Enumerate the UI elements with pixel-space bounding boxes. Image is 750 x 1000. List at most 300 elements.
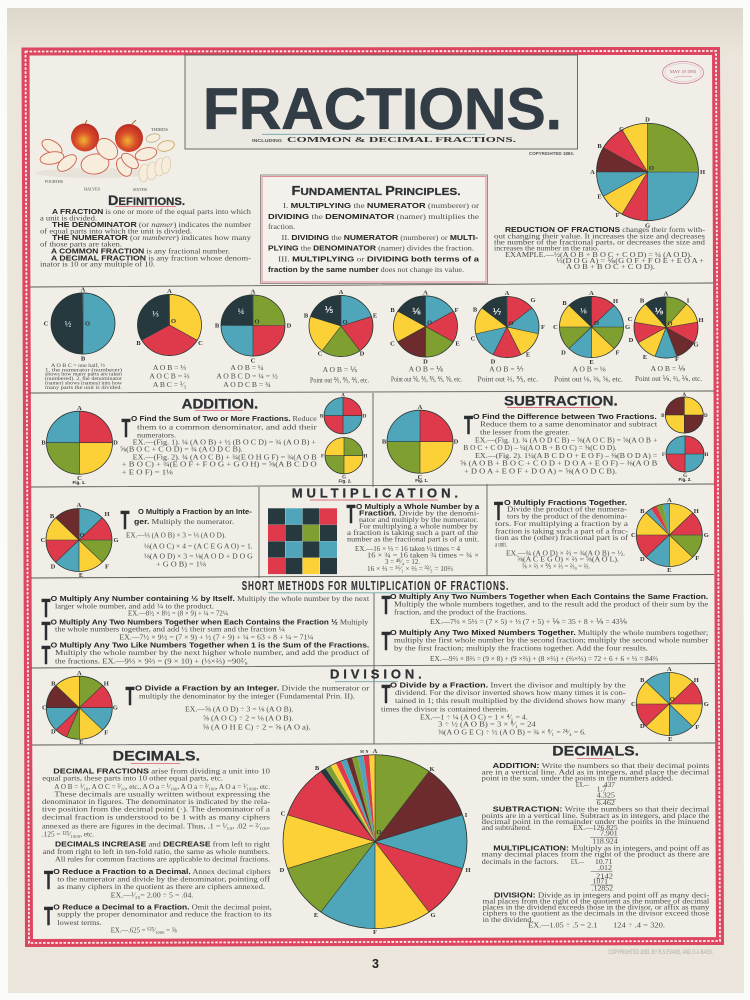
text: multiply fraction by integer: O Multiply a Fraction by an Inte- [138, 507, 252, 516]
pie: fifths: B [304, 313, 309, 319]
text: reduce fraction to decimal: as many ciphers in the quotient as there are ciphers annexed. [57, 882, 265, 891]
text: reduce fraction to decimal: O Reduce a Fraction to a Decimal. Annex decimal ciphers [53, 867, 271, 876]
drop cap T: T [382, 679, 391, 709]
text: reduction of fractions: A O B + B O C + C O D). [566, 262, 655, 271]
pie: fifths [304, 289, 377, 358]
slice captions: SIXTHS [133, 188, 147, 192]
pie: eighths: F [616, 350, 620, 357]
addition rule: EX.— [576, 780, 589, 789]
text: reduction of fractions: increases the number in the ratio. [494, 244, 599, 253]
addition rule: 1.7 [597, 785, 607, 794]
pie: reduction of fractions: C [619, 126, 624, 133]
copyright line: COPYRIGHTED 1893. [529, 151, 574, 156]
pie: sixths: O [427, 320, 432, 327]
decimals text: These decimals are usually written without expressing the [54, 790, 271, 799]
pie: sevenths: F [541, 324, 545, 331]
caption: sixths: Point out ⅙, ⅖, ⅗, ⅘, ⅚, etc. [391, 374, 462, 384]
left methods text: O Multiply Any Number containing ½ by Itself. Multiply the whole number by the next [51, 594, 370, 603]
text: divide by a fraction: 3 ÷ ½ (A O B) = 3 × ⁸⁄₁ = 24 [438, 719, 536, 728]
text: reduction of fractions [494, 225, 706, 271]
caption: thirds: A O B = ⅓ [153, 363, 186, 372]
title: Fractions: FRACTIONS. [203, 77, 562, 142]
text: divide fraction by integer: ⅝ (A O C) ÷ 2 = ⅛ (A O B). [203, 714, 293, 723]
pie: subtraction figure 2 bottom [662, 436, 709, 479]
pie: sixths: F [455, 307, 459, 314]
principles text: fraction by the same number does not change its value. [268, 265, 464, 274]
pie: thirds [136, 288, 203, 356]
definition text: inator is 10 or any multiple of 10. [40, 260, 155, 269]
multiplication rule [482, 844, 710, 893]
text: multiply fractions together: Divide the product of the numera- [507, 505, 628, 514]
text: reduction of fractions: the number of the fractional parts, or decreases the size and [494, 238, 705, 247]
decimals text: equal parts, these parts into 10 other equal parts, etc. [42, 774, 223, 783]
text: multiply fractions together: fraction is taking such a part of a frac- [495, 526, 629, 535]
pie: addition figure 1: C [77, 475, 82, 482]
pie: ninths: F [675, 356, 679, 363]
pie: divide by integer: D [51, 729, 56, 735]
heading: division: DIVISION. [330, 666, 422, 681]
subtraction text: the lesser from the greater. [480, 427, 570, 436]
text: reduction of fractions: out changing their value. It increases the size and decreases [494, 232, 705, 240]
drop cap T: T [44, 865, 53, 895]
addition text: numerators. [137, 430, 176, 439]
heading: addition: ADDITION. [182, 396, 258, 412]
library stamp [662, 62, 704, 84]
text: reduction of fractions: REDUCTION OF FRACTIONS changes their form with- [505, 225, 706, 234]
pie: multiply by integer: G [113, 537, 119, 544]
pie: multiply fractions: C [631, 532, 636, 539]
caption: thirds [149, 363, 190, 389]
checker grid [268, 508, 337, 574]
definition text: of equal parts into which the unit is divided. [40, 226, 192, 235]
pie: multiply fractions: D [640, 556, 645, 563]
pie: large decimal circle: C [281, 811, 286, 818]
text: multiply fractions together: ⅝ × ⅔ × ⅖ × ⅔ = ⅔₀ = ⅔. [522, 561, 590, 570]
pie: ninths: A [664, 291, 669, 297]
pie: addition figure 2 bottom: H [364, 455, 368, 460]
caption: thirds: A O C B = ⅔ [149, 372, 190, 380]
pie: fifths: A [339, 289, 344, 296]
principles text: III. MULTIPLYING or DIVIDING both terms of a [278, 254, 480, 264]
multiplication rule: 1071 [593, 876, 608, 885]
caption: fifths: A O B = ⅕ [323, 365, 358, 374]
pie: fifths: E [373, 313, 377, 319]
pie: subtraction figure 1: D [454, 439, 459, 446]
pie: fifths: O [342, 319, 348, 326]
text: multiply fractions together: tion as the (other) fractional part is of [495, 533, 629, 542]
pie: halves: C [44, 321, 49, 327]
pie: fourths: O [254, 319, 260, 326]
text: multiply whole number by fraction: nator and multiply by the numerator. [359, 515, 478, 524]
text: multiply whole number by fraction: 16 × ⅔ = ¹⁶⁄₁ × ⅔ = ³²⁄₃ = 10⅔ [367, 564, 453, 573]
text: multiply fraction by integer: EX.—⅓ (A O B) × 3 = ⅓ (A O D). [126, 531, 226, 540]
drop cap T: T [120, 505, 130, 535]
text: multiply whole number by fraction: O Multiply a Whole Number by a [356, 502, 480, 511]
pie: ninths: E [643, 354, 647, 361]
text: multiply fraction by integer: + G O B) = 1⅛ [156, 560, 206, 569]
left methods text: EX.—8½ × 8½ = (8 × 9) + ¼ = 72¼ [128, 609, 228, 618]
text: multiply fractions together: tors by the product of the denomina- [507, 511, 627, 520]
pie: multiply fractions: A [667, 497, 672, 504]
subtraction rule: 118.924 [592, 836, 618, 845]
pie: sixths: E [455, 341, 460, 348]
decimals text: All rules for common fractions are applicable to decimal fractions. [55, 854, 270, 863]
pie: sevenths: C [471, 335, 476, 342]
principles text: PLYING the DENOMINATOR (namer) divides the fraction. [268, 244, 474, 253]
subtraction text: + D O A + E O F + D O A) = ⅝(A O D C B). [464, 466, 617, 475]
pie: sevenths: O [508, 320, 514, 327]
decimals text: tive position from the decimal point (·). The denominator of a [42, 805, 271, 814]
text: reduce decimal to fraction: O Reduce a Decimal to a Fraction. Omit the decimal point, [53, 902, 272, 911]
figure captions: Fig. 2. [338, 478, 352, 484]
text: divide by a fraction: dividend. For the divisor inverted shows how many times it is con- [395, 688, 626, 697]
text: multiply fraction by integer: ⅛(A O C) × 4 = (A C E G A O) = 1. [144, 541, 253, 550]
pie: divide by fraction: O [670, 696, 675, 703]
addition text [120, 414, 317, 477]
text: reduce decimal to fraction: supply the proper denominator and reduce the fraction to its [57, 910, 272, 919]
pie: large decimal circle: H [465, 867, 471, 874]
decimals text: .125 = ¹²⁵⁄₁₀₀₀, etc. [42, 830, 94, 839]
right drop caps [382, 590, 391, 656]
heading: definitions: DEFINITIONS. [108, 192, 185, 208]
subtraction text [460, 412, 658, 475]
pie: divide by fraction: D [640, 723, 645, 730]
text: reduce fraction to decimal: EX.—¹⁄₂₅= 2.00 ÷ 5 = .04. [111, 890, 193, 899]
division rule: places in the dividend exceeds those in the divisor, or affix as many [483, 903, 710, 912]
pie: ninths: B [640, 298, 645, 305]
panel: definitions [40, 192, 252, 269]
subtitle [252, 135, 516, 144]
caption: halves: shows how many parts are taken [45, 372, 122, 378]
pie: multiply by integer: D [51, 564, 56, 571]
addition rule: 6.462 [597, 798, 615, 807]
pie: reduction of fractions: B [597, 143, 602, 150]
pie: subtraction figure 2 top: A [682, 393, 687, 398]
pie: addition figure 2 top: D [363, 415, 367, 420]
addition text: them to a common denominator, and add their [137, 422, 317, 431]
pie: addition figure 2 top: A [341, 394, 345, 399]
pie: halves: A [81, 287, 86, 293]
pie: large decimal circle [280, 748, 471, 936]
subtraction rule [482, 805, 710, 845]
text: divide fraction by integer [135, 684, 370, 731]
slice captions: HALVES [84, 188, 100, 192]
text: multiply whole number by fraction: EX.—16 × ⅓ = 16 taken ⅓ times = 4 [355, 544, 460, 553]
page number: 3 [372, 957, 379, 971]
left drop caps: T [42, 593, 51, 623]
pie: addition figure 2 bottom: F [321, 455, 324, 460]
pie: eighths: B [562, 300, 567, 307]
pie: eighths: C [553, 324, 558, 331]
panel: short methods [42, 578, 709, 670]
heading: decimals: DECIMALS. [113, 748, 200, 764]
left methods text: the fractions. EX.—9⅓ × 9⅔ = (9 × 10) + (⅓×⅔) =90²⁄₉ [55, 656, 248, 665]
caption: fourths [216, 363, 278, 389]
subtraction rule: EX.—126.825 [573, 823, 618, 832]
multiplication rule: .12852 [592, 884, 613, 893]
caption: halves: (namer) shows (names) into how [45, 379, 122, 386]
pie: thirds: B [136, 340, 141, 347]
right methods text [390, 592, 709, 663]
pie: addition figure 2 bottom: G [342, 476, 346, 481]
subtraction text: O Find the Difference between Two Fractions. [473, 412, 657, 421]
pie: large decimal circle: G [430, 912, 436, 919]
caption: halves [45, 362, 122, 391]
addition text: + E O F) = 1⅛ [122, 468, 173, 477]
decimals text: DECIMAL FRACTIONS arise from dividing a unit into 10 [53, 766, 270, 775]
pie: sevenths: G [530, 297, 536, 304]
title underline [262, 133, 485, 135]
drop cap T: T [44, 901, 53, 931]
pie: eighths [553, 290, 630, 366]
caption: sixths: A O B = ⅙ [409, 364, 444, 374]
pie: large decimal circle: B [315, 765, 320, 772]
definition text: A FRACTION is one or more of the equal parts into which [52, 207, 251, 216]
pie: addition figure 1: A [77, 405, 82, 412]
pie: subtraction figure 1 [382, 404, 459, 481]
pie: divide by fraction [631, 666, 709, 743]
division rule: in the dividend. [483, 915, 533, 924]
pie: fourths: A [251, 289, 256, 295]
pie: fifths: C [318, 351, 323, 358]
left methods text [51, 594, 370, 665]
pie: sixths: C [390, 341, 395, 348]
pie: multiply by integer: H [104, 511, 110, 518]
subtraction rule: and subtrahend. [482, 823, 532, 832]
decimals text [42, 766, 271, 863]
pie: large decimal circle: F [373, 929, 377, 936]
text: divide by a fraction: tained in 1; this result multiplied by the dividend shows how many [395, 696, 626, 705]
pie: fifths: D [360, 351, 365, 358]
pie: subtraction figure 2 top: D [704, 414, 708, 419]
pie: fourths: ¼ [238, 306, 244, 316]
caption: eighths: Point out ⅛, ⅜, ⅝, etc. [554, 374, 623, 384]
pie: multiply by integer [41, 502, 119, 579]
pie: divide by integer: G [113, 705, 118, 712]
multiplication rule: 2142 [596, 871, 613, 880]
right methods text: by the first fraction; multiply the fractions together. Add the four results. [394, 643, 648, 652]
right methods text: Multiply the whole numbers together, and to the result add the product of their sum by the [394, 599, 709, 608]
left methods text: O Multiply Any Two Like Numbers Together when 1 is the Sum of the Fractions. [51, 641, 369, 650]
text: multiply fractions together: tors. For multiplying a fraction by a [495, 519, 629, 528]
pie: sevenths [471, 290, 545, 365]
caption: fourths: A O B C D = ¼ = ½ [216, 372, 278, 380]
pie: reduction of fractions: G [645, 223, 650, 229]
pie: eighths: G [625, 324, 630, 331]
heading: subtraction: SUBTRACTION. [504, 393, 618, 409]
pie: thirds: C [198, 340, 203, 347]
definition text: A COMMON FRACTION is any fractional number. [51, 247, 230, 256]
pie: multiply by integer: F [105, 564, 109, 571]
addition rule: point in the sum, under the points in the numbers added. [482, 773, 673, 782]
heading: multiplication: MULTIPLICATION. [292, 486, 458, 501]
multiplication rule: decimals in the factors. [482, 857, 559, 866]
definition text: THE NUMERATOR (or numberer ) indicates how many [52, 233, 251, 242]
pie: large decimal circle: D [280, 867, 285, 874]
pie: multiply fractions: E [667, 567, 671, 574]
pie: divide by integer: H [104, 681, 109, 688]
pie: fourths: D [287, 323, 292, 329]
pie: subtraction figure 2 top [661, 393, 708, 433]
pie: multiply by integer: O [79, 532, 85, 539]
pie: subtraction figure 1: B [382, 439, 387, 446]
right drop caps: T [382, 626, 391, 656]
caption: ninths: Point out ⅑, ⅔, ⅑, etc. [635, 374, 702, 383]
pie: addition figure 2 top: B [320, 415, 324, 420]
pie: sevenths: E [526, 352, 530, 359]
pie: large decimal circle: A [373, 748, 378, 755]
pie: sixths: A [423, 290, 428, 296]
right methods text: fraction, and the product of the fractions. [394, 607, 527, 616]
division rule: mal places from the right of the quotient as the number of decimal [483, 897, 709, 906]
pie: fifths: ⅕ [325, 305, 334, 315]
pie: multiply by integer: C [41, 537, 46, 544]
pie: divide by fraction: A [667, 666, 672, 673]
caption: halves: many parts the unit is divided. [45, 385, 122, 391]
figure captions: Fig. 2. [678, 477, 692, 482]
decimals text: A O B = ¹⁄₁₀, A O C = ²⁄₁₀, etc., A O a = ¹⁄₁₀₀, A O a = ²⁄₁₀₀, A O a = ¹⁄₁₀₀₀, etc. [54, 782, 270, 791]
decimals text: DECIMALS INCREASE and DECREASE from left to right [55, 840, 271, 849]
drop cap T: T [126, 681, 135, 711]
pie: large decimal circle: O [376, 829, 382, 836]
subtraction text: Reduce them to a same denominator and subtract [480, 420, 658, 429]
subtitle: COMMON & DECIMAL FRACTIONS. [287, 135, 516, 144]
panel: decimals left [42, 748, 272, 935]
right drop caps: T [382, 590, 391, 620]
text: multiply whole number by fraction: For multiplying a whole number by [359, 522, 478, 530]
text: multiply fractions together [495, 498, 629, 570]
drop cap T: T [122, 413, 131, 443]
pie: sixths: D [423, 358, 428, 365]
text: reduction of fractions: ⅓(D O G A) = ⅙(G O F + F O E + E O A + [556, 256, 704, 265]
right methods text: EX.—9⅔ × 8⅔ = (9 × 8) + (9 ×⅔) + (8 ×⅔) + (⅔×⅔) = 72 + 6 + 6 + ⅓ = 84⅔ [430, 654, 658, 663]
pie: divide by fraction: B [640, 677, 645, 684]
caption: sevenths: Point out ⅔, ⅗, etc. [478, 374, 538, 384]
pie: multiply by integer: B [50, 513, 55, 520]
subtraction text: ⅝ (A O B + B O C + C O D + D O A + E O F) – ⅜(A O B [460, 458, 657, 467]
pie: divide by fraction: H [694, 677, 699, 684]
panel: division [42, 666, 709, 746]
pie: sixths [390, 290, 460, 365]
text: multiply fraction by integer [126, 507, 253, 569]
heading: decimals: DECIMALS. [552, 743, 639, 759]
decimals text: and from right to left in ten-fold ratio, the same as whole numbers. [42, 847, 270, 856]
pie: eighths: ⅛ [580, 306, 587, 316]
illustration: apples and slices [35, 120, 176, 192]
subtraction rule: points are in a vertical line. Subtract as in integers, and place the [482, 811, 710, 820]
text: divide by a fraction: ⅜(A O G E C) ÷ ½ (A O B) = ¾ × ⁸⁄₁ = ²⁴⁄₄ = 6. [438, 727, 586, 736]
pie: divide by fraction: E [668, 736, 672, 743]
pie: sevenths: ⅐ [493, 307, 502, 317]
text: multiply fractions together: O Multiply Fractions Together. [504, 498, 627, 507]
definition text: A DECIMAL FRACTION is any fraction whose denom- [51, 253, 252, 262]
slice captions: FOURTHS [45, 180, 63, 184]
pie: divide by fraction: F [695, 724, 699, 731]
multiplication rule: EX.— [571, 857, 584, 866]
pie: ninths: ⅑ [655, 306, 664, 316]
pie: large decimal circle: E [314, 912, 318, 919]
panel: decimals right [482, 743, 710, 930]
pie: reduction of fractions: A [590, 169, 595, 176]
division rule: 124 ÷ .4 = 320. [613, 921, 665, 930]
pie: large decimal circle: I [465, 812, 468, 819]
text: multiply fractions together: ⅝(A C E G O) × ⅔ = ⅝(A O L). [517, 555, 619, 564]
subtraction text: EX.—(Fig. 2). 1¼(A B C D O + E O F) – ⅜(B O D A) = [475, 451, 657, 460]
text: multiply fractions together: a unit. [495, 540, 507, 549]
addition rule: 4.325 [597, 790, 615, 799]
pie: fourths [215, 289, 292, 364]
figure captions: Fig. 1. [72, 480, 86, 485]
pie: subtraction figure 2 bottom: H [705, 453, 709, 458]
right methods text: EX.—7⅓ × 5⅓ = (7 × 5) + ⅓ (7 + 5) + ⅑ = 35 + 8 + ⅑ = 43⅑ [430, 617, 628, 626]
caption: fourths: A O B = ¼ [230, 363, 264, 372]
right methods text: O Multiply Any Two Numbers Together when Each Contains the Same Fraction. [390, 592, 708, 601]
text: multiply whole number by fraction: 3 = ⁴⁸⁄₄ = 12. [385, 557, 420, 566]
text: reduce decimal to fraction: EX.—.625 = ⁶²⁵⁄₁₀₀₀ = ⅝ [111, 926, 177, 935]
left drop caps [42, 593, 51, 670]
pie: addition figure 2 bottom [321, 438, 368, 481]
left methods text: O Multiply Any Two Numbers Together when Each Contains the Fraction ½ Multiply [51, 617, 369, 626]
captions under pies [45, 362, 702, 391]
pie: reduction of fractions: O [649, 165, 654, 172]
division rule: DIVISION: Divide as in integers and point off as many deci- [494, 891, 710, 900]
panel: multiplication [41, 486, 709, 579]
pie: divide by integer: F [104, 730, 108, 736]
text: divide by a fraction: EX.—1 ÷ ¼ (A O C) = 1 × ⁴⁄₁ = 4. [420, 712, 528, 721]
definition text: a unit is divided. [40, 214, 97, 222]
pie: sevenths: B [473, 307, 478, 314]
panel: subtraction [382, 393, 709, 483]
principles text [268, 201, 480, 274]
pie: large decimal circle: K [429, 766, 435, 773]
pie: addition figure 1 [41, 405, 118, 482]
pie: divide by integer: B [51, 681, 56, 688]
principles text: II. DIVIDING the NUMERATOR (numberer) or MULTI- [282, 233, 479, 242]
left methods text: larger whole number, and add ¼ to the product. [55, 601, 214, 610]
addition text: + B O C) + ¾(E O F + F O G + G O H) = ⅝(A B C D O [122, 460, 317, 469]
pie: addition figure 1: D [113, 440, 118, 447]
apple left [71, 120, 99, 152]
caption: fourths: A O D C B = ¾ [223, 380, 271, 389]
text: divide fraction by integer: O Divide a Fraction by an Integer. Divide the numerator or [135, 684, 370, 693]
multiplication rule: .012 [598, 863, 612, 872]
text: multiply whole number by fraction: a fraction is taking such a part of the [347, 528, 479, 537]
text: reduce fraction to decimal: to the numerator and divide by the denominator, pointing off [57, 875, 271, 884]
pie: divide by integer: E [79, 739, 83, 746]
row: unit pies halves to ninths [44, 287, 704, 366]
text: multiply fraction by integer: ger. Multiply the numerator. [134, 517, 234, 526]
text: reduce fraction to decimal [53, 867, 271, 899]
slice captions: THIRDS [151, 128, 168, 132]
multiplication rule: many decimal places from the right of the product as there are [482, 850, 710, 859]
apple slices [39, 132, 176, 183]
caption: halves: (numbered). 2, the denominator [45, 375, 122, 382]
right methods text: O Multiply Any Two Mixed Numbers Together. Multiply the whole numbers together; [390, 628, 708, 637]
addition text: EX.—(Fig. 2). ¾ (A O C B) + ¾(E O H G F) = ¾(A O B [133, 452, 317, 461]
left methods text: the whole numbers together, and add ½ their sum and the fraction ¼ [55, 625, 285, 634]
text: reduce decimal to fraction: lowest terms. [57, 918, 102, 927]
definition text [40, 207, 252, 269]
pie: large decimal circle: M [360, 750, 364, 754]
pie: subtraction figure 2 bottom: G [683, 474, 687, 479]
caption: eighths: A O B = ⅛ [572, 364, 606, 374]
division rule [483, 891, 710, 930]
text: multiply whole number by fraction: 16 × ¾ = 16 taken ¾ times = ¾ × [367, 550, 479, 560]
text: multiply fraction by integer: ⅛(A O D) × 3 = ⅛(A O D + D O G [144, 551, 253, 560]
text: divide fraction by integer: EX.—⅝ (A O D) ÷ 3 = ⅛ (A O B). [185, 705, 293, 714]
addition text: O Find the Sum of Two or More Fractions. Reduce [131, 414, 317, 423]
pie: reduction of fractions: H [700, 169, 705, 176]
